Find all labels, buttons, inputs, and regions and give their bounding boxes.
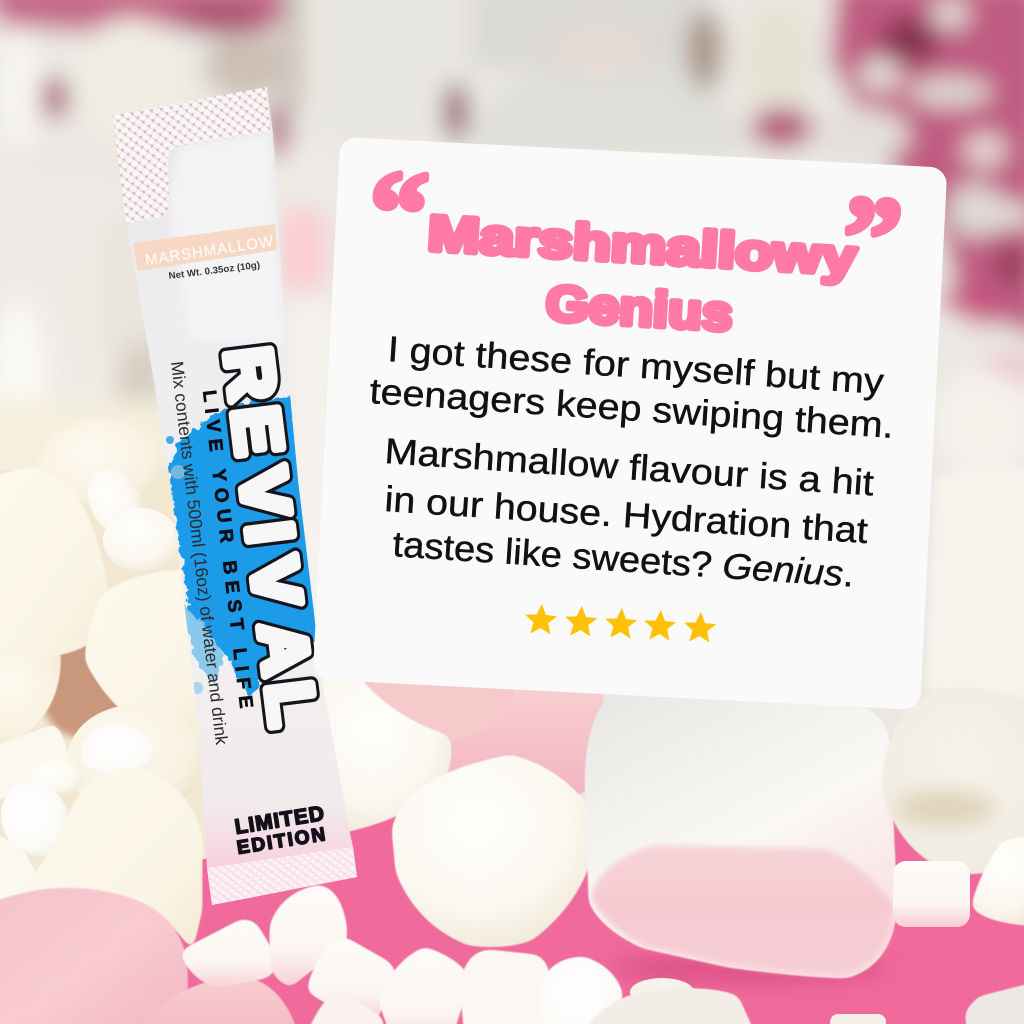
opening quote mark: “ [366, 145, 431, 279]
tagline: LIVE YOUR BEST LIFE [198, 389, 256, 709]
marshmallows under the review card [318, 672, 604, 947]
flavour band [133, 224, 277, 271]
pink table surface [150, 790, 1024, 1024]
flavour name: MARSHMALLOW [144, 233, 275, 269]
review text, first paragraph [368, 328, 895, 446]
review heading: Marshmallowy [426, 205, 858, 286]
sachet body [113, 87, 357, 905]
instructions: Mix contents with 500ml (16oz) of water and drink [167, 360, 232, 746]
review heading [426, 205, 858, 342]
bottom crimped seal [207, 847, 357, 905]
brand name: REVIVAL [211, 343, 331, 730]
marshmallows, right [882, 687, 1024, 1024]
review text, second paragraph [383, 430, 875, 595]
marshmallow pile, left [0, 459, 215, 1024]
mid-ground marshmallows, right [926, 464, 1024, 700]
product sachet [113, 87, 357, 905]
review heading: Genius [544, 275, 734, 342]
large marshmallow, foreground [585, 695, 897, 978]
review text, first paragraph: teenagers keep swiping them. [368, 370, 895, 446]
brown gap between marshmallows [40, 642, 124, 738]
review text, second paragraph: in our house. Hydration that [383, 478, 869, 551]
shadow under large marshmallow [610, 954, 890, 982]
review text, second paragraph: tastes like sweets? Genius. [391, 523, 855, 595]
top crimped seal [113, 87, 270, 224]
review card [313, 137, 947, 710]
cream backing behind left pile [0, 470, 205, 950]
limited edition [233, 802, 327, 859]
review text, second paragraph: Marshmallow flavour is a hit [383, 430, 875, 503]
small marshmallows, bottom row [112, 885, 886, 1024]
card background [313, 137, 947, 710]
five star rating [524, 603, 717, 643]
limited edition: EDITION [235, 824, 327, 859]
brand name: REVIVAL [211, 343, 331, 730]
blurred marshmallow, upper left [39, 420, 165, 510]
blue splash [166, 395, 325, 695]
review text, first paragraph: I got these for myself but my [386, 328, 885, 402]
limited edition: LIMITED [233, 802, 326, 839]
net weight: Net Wt. 0.35oz (10g) [168, 260, 261, 282]
closing quote mark: ” [840, 171, 905, 305]
white inner highlight [170, 133, 282, 340]
